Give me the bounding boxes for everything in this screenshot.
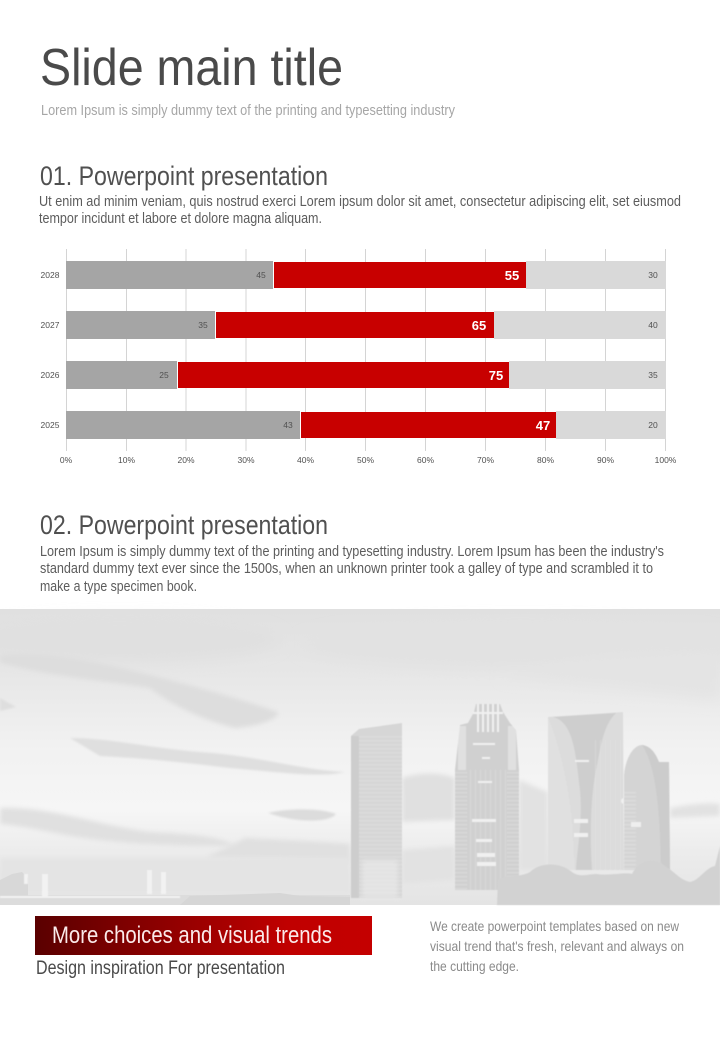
bar: 2025: 20 — [648, 420, 658, 430]
bar: 2028: 55 — [505, 268, 519, 283]
x axis labels: 50% — [357, 455, 374, 465]
bar: 2027: 65 — [472, 318, 486, 333]
x axis labels: 30% — [237, 455, 255, 465]
x axis labels: 60% — [417, 455, 434, 465]
treeline — [497, 846, 720, 905]
title: Slide main title — [40, 39, 343, 97]
bar: 2028: 30 — [648, 270, 658, 280]
text block: section 02 body: make a type specimen book. — [40, 578, 197, 595]
bar: 2026: 25 — [159, 370, 169, 380]
horizon shoreline — [0, 870, 350, 905]
building 3 — [548, 712, 627, 870]
x axis labels: 100% — [655, 455, 677, 465]
photo: city skyline — [0, 609, 720, 905]
banner subtitle: Design inspiration For presentation — [36, 958, 285, 979]
bar: 2025 — [66, 411, 666, 439]
bar: 2026 — [66, 361, 666, 389]
y axis labels: 2026 — [41, 370, 60, 380]
bar: 2027: 40 — [648, 320, 658, 330]
heading: section 02: 02. Powerpoint presentation — [40, 510, 328, 540]
clouds — [0, 618, 720, 893]
x axis labels: 20% — [177, 455, 195, 465]
building 1 — [351, 723, 402, 898]
stacked bar chart — [41, 249, 677, 465]
building 2 — [455, 704, 519, 890]
text block: section 01 body — [39, 193, 681, 227]
y axis labels: 2027 — [41, 320, 60, 330]
bar: 2027 — [66, 311, 666, 339]
building 4 — [624, 745, 670, 870]
x axis labels: 80% — [537, 455, 554, 465]
text block: description: the cutting edge. — [430, 958, 519, 974]
x axis labels: 10% — [118, 455, 135, 465]
x axis labels: 90% — [597, 455, 614, 465]
x axis labels: 40% — [297, 455, 314, 465]
bar: 2026: 75 — [489, 368, 503, 383]
text block: section 01 body: tempor incidunt et labore et dolore magna aliquam. — [39, 210, 322, 227]
y axis labels: 2025 — [41, 420, 60, 430]
banner — [35, 916, 372, 955]
text block: section 02 body — [40, 543, 664, 595]
text block: description: We create powerpoint templates based on new — [430, 918, 680, 934]
text block: description: visual trend that's fresh, relevant and always on — [430, 938, 684, 954]
bar: 2025: 47 — [536, 418, 550, 433]
banner text: More choices and visual trends — [52, 922, 332, 949]
heading: section 01: 01. Powerpoint presentation — [40, 161, 328, 191]
y axis labels: 2028 — [41, 270, 60, 280]
bar: 2025: 43 — [283, 420, 293, 430]
x axis labels — [60, 455, 677, 465]
bar: 2027: 35 — [198, 320, 208, 330]
subtitle: Lorem Ipsum is simply dummy text of the printing and typesetting industry — [41, 102, 455, 119]
bar: 2028 — [66, 261, 666, 289]
y axis labels — [41, 270, 60, 430]
bar: 2026: 35 — [648, 370, 658, 380]
bar: 2028: 45 — [256, 270, 266, 280]
text block: description — [430, 918, 684, 974]
x axis labels: 0% — [60, 455, 73, 465]
x axis labels: 70% — [477, 455, 494, 465]
